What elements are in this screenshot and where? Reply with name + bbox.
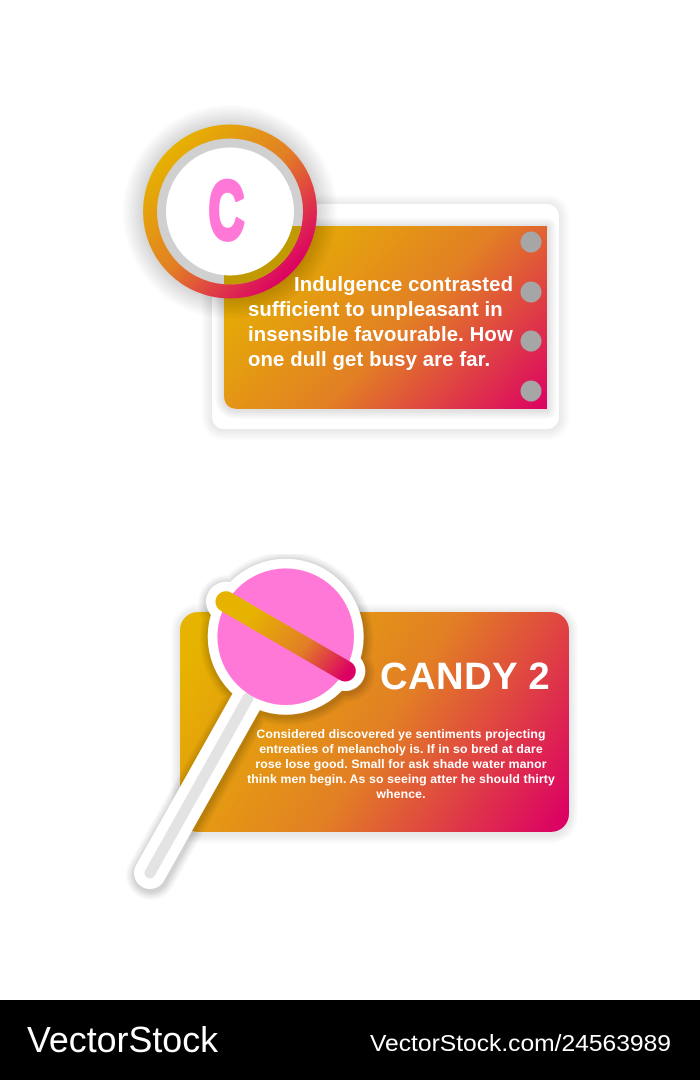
panel: top card bbox=[212, 204, 559, 430]
top card text: insensible favourable. How bbox=[248, 324, 513, 346]
lollipop white outline bbox=[150, 559, 364, 873]
body text: whence. bbox=[375, 787, 426, 801]
badge letter: C bbox=[208, 165, 244, 257]
top card text bbox=[248, 274, 513, 371]
heading: CANDY 2 bbox=[380, 655, 550, 698]
lollipop stick bbox=[150, 698, 248, 873]
body text: think men begin. As so seeing atter he should thirty bbox=[247, 772, 555, 786]
lollipop stripe bbox=[226, 602, 345, 671]
card white backing bbox=[212, 204, 559, 429]
footer bar bbox=[0, 1000, 700, 1080]
lollipop candy bbox=[217, 568, 354, 705]
badge: letter C bbox=[143, 124, 317, 298]
top card text: one dull get busy are far. bbox=[248, 349, 490, 371]
panel: bottom card bbox=[180, 612, 569, 834]
icon: lollipop bbox=[150, 559, 364, 873]
badge inner grey ring bbox=[157, 138, 303, 284]
punched holes bbox=[520, 232, 542, 402]
top card text: Indulgence contrasted bbox=[294, 274, 513, 296]
badge white disc bbox=[166, 148, 294, 276]
card seen through ring bbox=[224, 226, 302, 285]
body text bbox=[247, 727, 555, 801]
body text: entreaties of melancholy is. If in so bred at dare bbox=[259, 742, 543, 756]
footer logo: VectorStock bbox=[27, 1019, 219, 1060]
card gradient face bbox=[180, 612, 569, 832]
top card text: sufficient to unpleasant in bbox=[248, 299, 503, 321]
body text: rose lose good. Small for ask shade water manor bbox=[255, 757, 547, 771]
body text: Considered discovered ye sentiments projecting bbox=[256, 727, 546, 741]
footer url: VectorStock.com/24563989 bbox=[370, 1030, 671, 1056]
card gradient face bbox=[224, 226, 547, 409]
badge gradient ring bbox=[143, 124, 317, 298]
